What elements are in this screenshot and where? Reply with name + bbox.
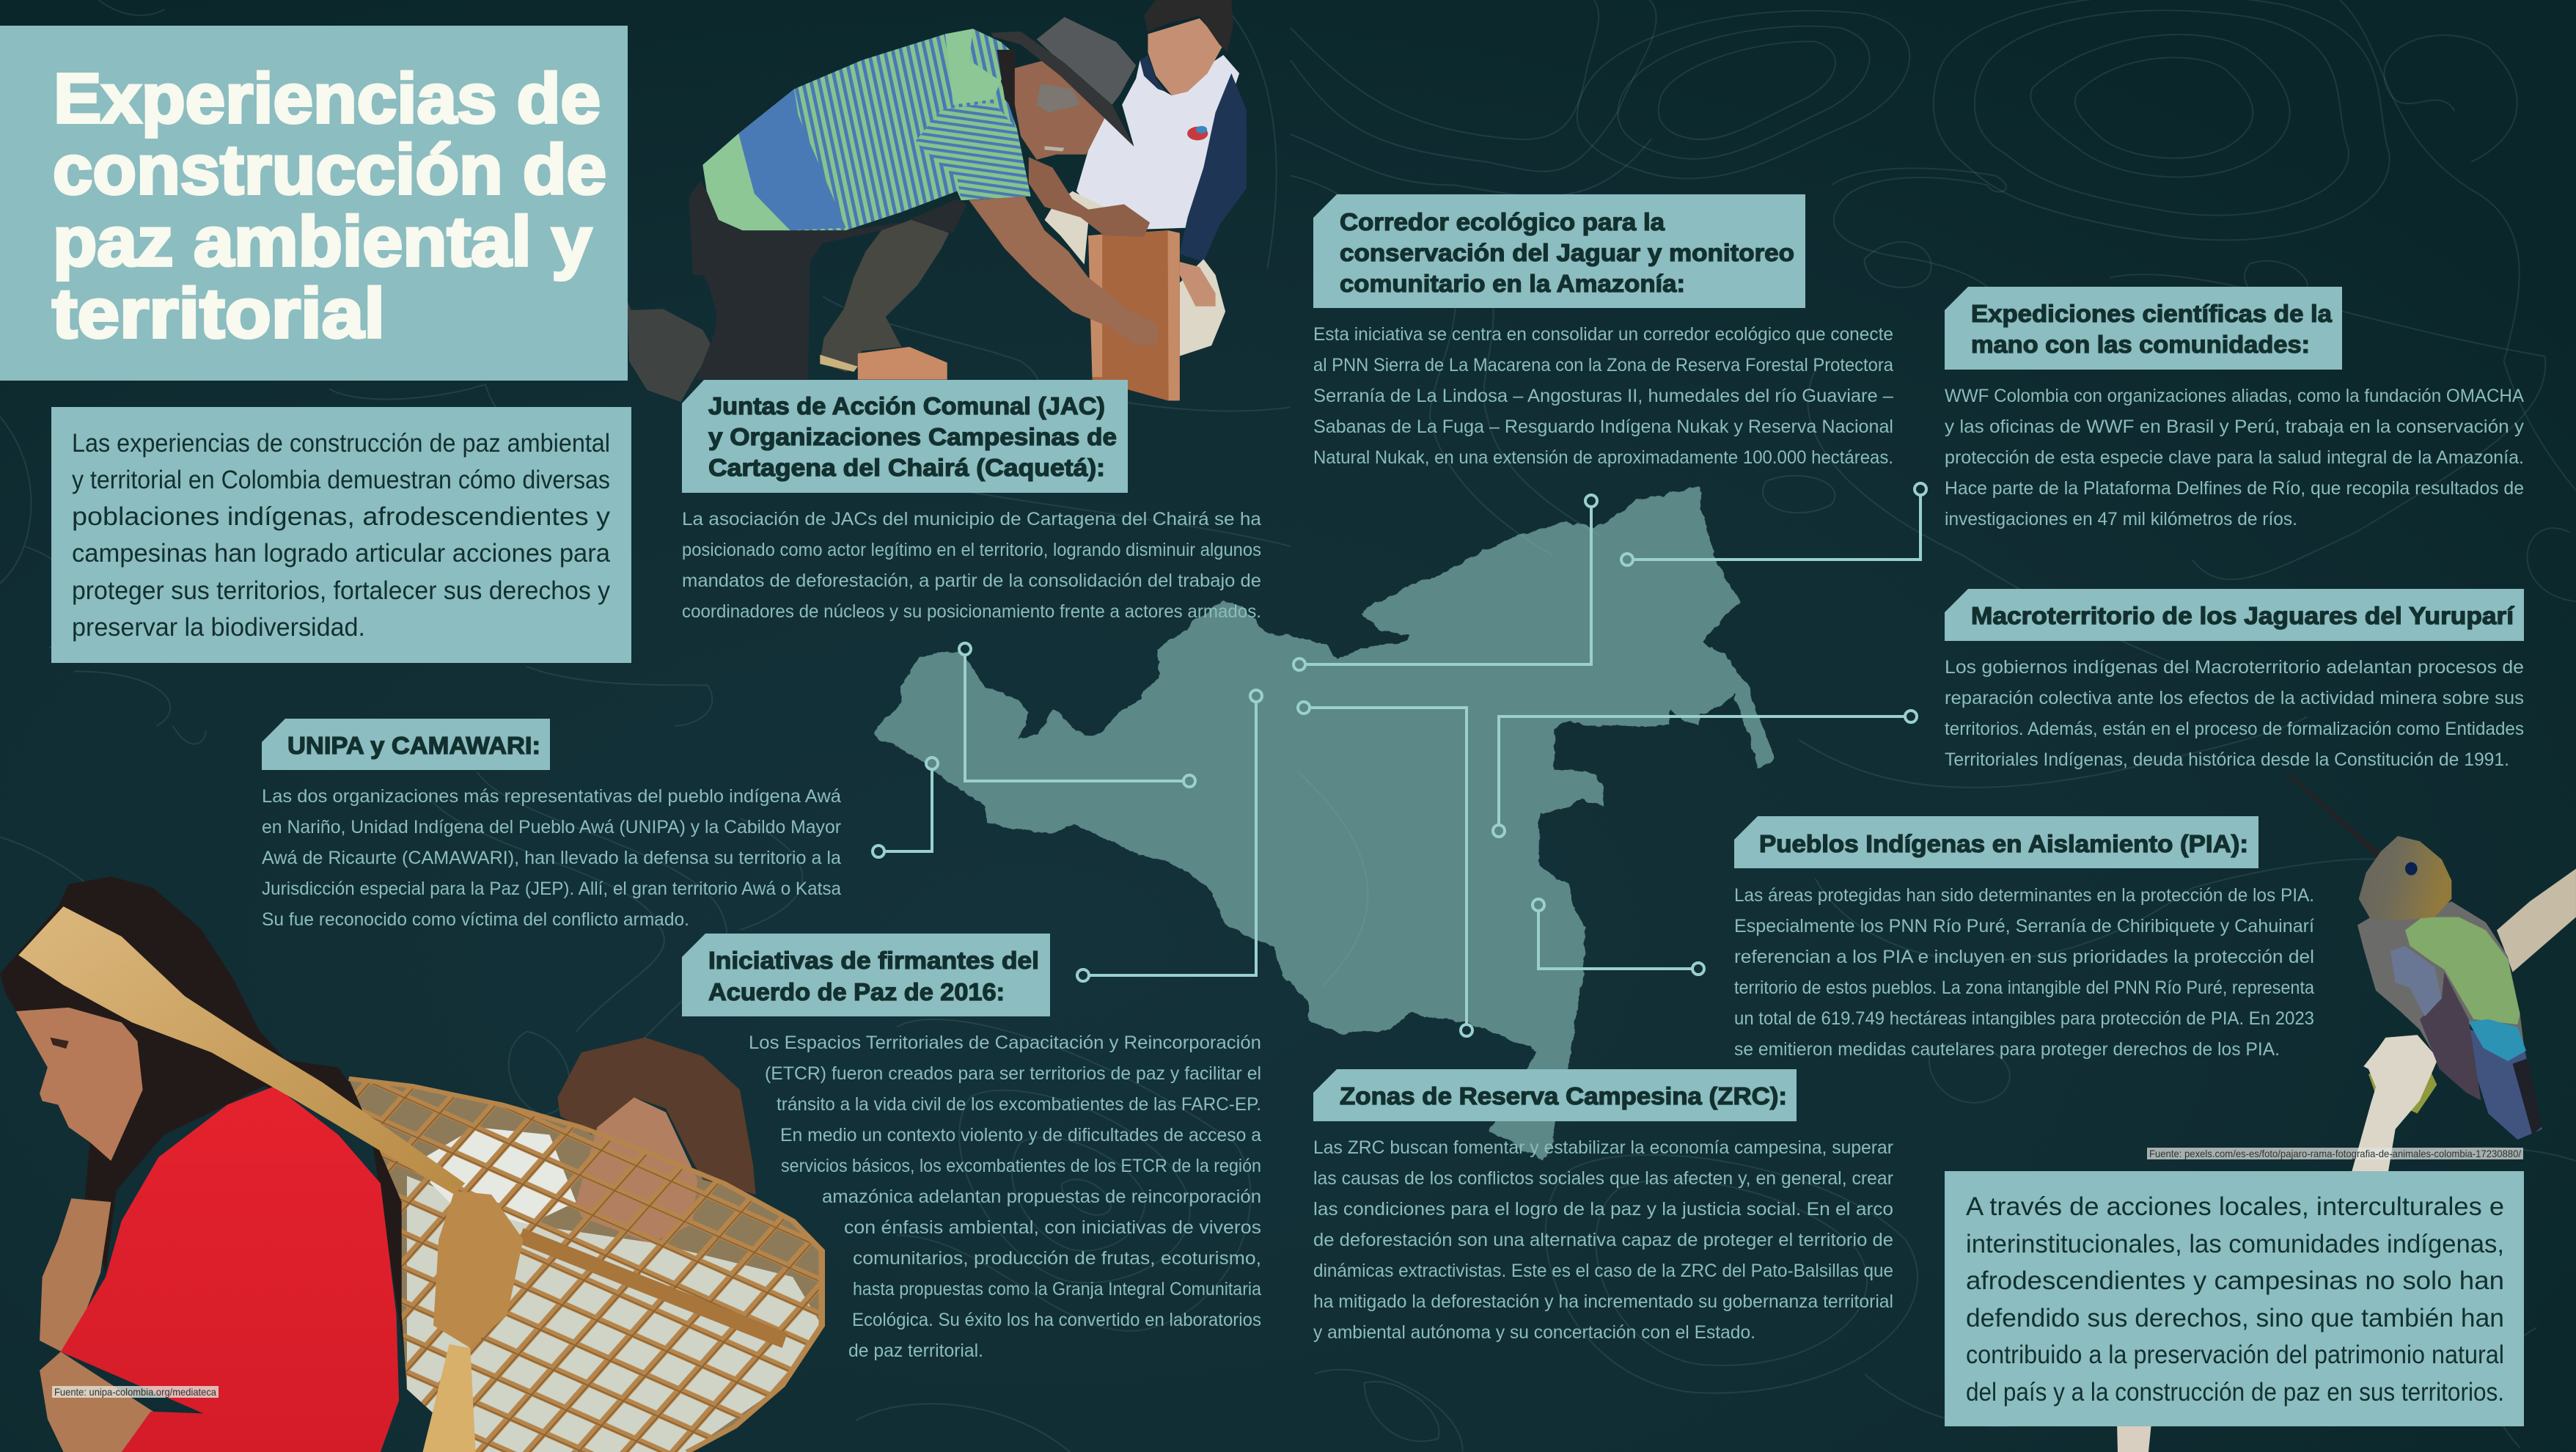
panel: conclusion: A través de acciones locales, interculturales e: [1966, 1192, 2504, 1221]
body text: Natural Nukak, en una extensión de aproximadamente 100.000 hectáreas.: [1313, 447, 1893, 468]
panel: conclusion: del país y a la construcción de paz en sus territorios.: [1966, 1378, 2504, 1407]
body text: de paz territorial.: [848, 1341, 983, 1361]
body text: hasta propuestas como la Granja Integral Comunitaria: [853, 1279, 1261, 1299]
tail: [2464, 1027, 2542, 1140]
panel: introduction: Las experiencias de construcción de paz ambiental: [72, 429, 610, 458]
body text: Esta iniciativa se centra en consolidar un corredor ecológico que conecte: [1313, 324, 1893, 345]
panel: conclusion: interinstitucionales, las comunidades indígenas,: [1966, 1230, 2504, 1258]
man: rear boot: [627, 301, 713, 402]
body text: Especialmente los PNN Río Puré, Serranía de Chiribiquete y Cahuinarí: [1734, 916, 2314, 936]
body text: La asociación de JACs del municipio de Cartagena del Chairá se ha: [682, 509, 1261, 529]
body text: las causas de los conflictos sociales que las afecten y, en general, crear: [1313, 1168, 1893, 1189]
body text: Awá de Ricaurte (CAMAWARI), han llevado la defensa su territorio a la: [262, 848, 841, 868]
body text: [1945, 657, 2524, 770]
body text: territorios. Además, están en el proceso de formalización como Entidades: [1945, 719, 2524, 739]
body text: [1734, 885, 2314, 1060]
upper branch: [2497, 869, 2576, 972]
woven basket: [349, 1079, 822, 1452]
panel: introduction: campesinas han logrado articular acciones para: [72, 539, 611, 568]
body text: dinámicas extractivistas. Este es el caso de la ZRC del Pato-Balsillas que: [1313, 1261, 1893, 1281]
connector: Iniciativas de firmantes: [1077, 690, 1262, 981]
body text: Sabanas de La Fuga – Resguardo Indígena Nukak y Reserva Nacional: [1313, 417, 1893, 437]
heading: [708, 392, 1117, 481]
body text: En medio un contexto violento y de dificultades de acceso a: [780, 1125, 1261, 1145]
man: front boot: [820, 220, 949, 372]
lower branch: [2352, 1035, 2438, 1173]
body text: Las ZRC buscan fomentar y estabilizar la economía campesina, superar: [1313, 1137, 1893, 1158]
body text: WWF Colombia con organizaciones aliadas, como la fundación OMACHA: [1945, 386, 2524, 406]
body text: Ecológica. Su éxito los ha convertido en laboratorios: [852, 1310, 1261, 1330]
photo: indigenous woman carrying child in basket: [0, 876, 822, 1452]
heading: [1340, 208, 1794, 297]
photo: hummingbird on branch: [2286, 773, 2576, 1173]
basket base: [349, 1079, 822, 1452]
body text: Hace parte de la Plataforma Delfines de Río, que recopila resultados de: [1945, 478, 2524, 499]
panel: introduction: proteger sus territorios, fortalecer sus derechos y: [72, 576, 610, 605]
block: Iniciativas de firmantes: [682, 934, 1261, 1361]
heading: [1971, 300, 2333, 358]
connector: Pueblos Indígenas: [1533, 899, 1704, 975]
panel: introduction: y territorial en Colombia demuestran cómo diversas: [72, 466, 610, 494]
body text: territorio de estos pueblos. La zona intangible del PNN Río Puré, representa: [1734, 978, 2314, 998]
block: Juntas de Acción Comunal: [682, 380, 1261, 622]
connector: Macroterritorio: [1493, 711, 1917, 837]
purple belly: [2420, 972, 2481, 1101]
cyan rump: [2469, 1019, 2526, 1061]
wooden nest box: [1088, 230, 1180, 400]
body text: con énfasis ambiental, con iniciativas de viveros: [844, 1217, 1261, 1238]
body text: coordinadores de núcleos y su posicionamiento frente a actores armados.: [682, 601, 1261, 622]
title: construcción de: [53, 131, 606, 209]
body text: [1945, 386, 2525, 529]
block: Macroterritorio: [1945, 589, 2524, 770]
title: paz ambiental y: [53, 202, 592, 281]
man: head: [997, 50, 1017, 113]
connector: Corredor ecológico: [1293, 495, 1597, 670]
head: [2359, 836, 2451, 920]
man: hat: [1037, 17, 1136, 107]
heading: Macroterritorio de los Jaguares del Yuruparí: [1971, 602, 2515, 629]
body text: servicios básicos, los excombatientes de los ETCR de la región: [781, 1156, 1261, 1176]
heading: y Organizaciones Campesinas de: [708, 423, 1117, 450]
beak: [2286, 773, 2388, 863]
body text: [682, 509, 1261, 622]
body text: se emitieron medidas cautelares para proteger derechos de los PIA.: [1734, 1039, 2280, 1060]
face: [16, 1008, 143, 1161]
red shirt: [61, 1086, 399, 1452]
heading: Expediciones científicas de la: [1971, 300, 2333, 327]
body text: [749, 1033, 1261, 1361]
block: Expediciones científicas: [1945, 287, 2525, 529]
heading: Zonas de Reserva Campesina (ZRC):: [1340, 1082, 1787, 1110]
body text: ha mitigado la deforestación y ha incrementado su gobernanza territorial: [1313, 1291, 1893, 1312]
panel: conclusion: contribuido a la preservación del patrimonio natural: [1966, 1341, 2504, 1369]
body: [2357, 901, 2525, 1071]
heading: comunitario en la Amazonía:: [1340, 270, 1685, 297]
heading: Iniciativas de firmantes del: [708, 947, 1039, 974]
body text: comunitarios, producción de frutas, ecoturismo,: [853, 1248, 1261, 1269]
man: shirt: [702, 29, 1031, 230]
panel: conclusion: afrodescendientes y campesinas no solo han: [1966, 1266, 2504, 1295]
block: UNIPA y CAMAWARI: [262, 719, 841, 930]
block: Pueblos Indígenas en Aislamiento: [1734, 816, 2314, 1060]
photo: farmer and woman with wooden box: [627, 0, 1247, 402]
body text: reparación colectiva ante los efectos de la actividad minera sobre sus: [1945, 688, 2524, 708]
block: Zonas de Reserva Campesina: [1313, 1069, 1893, 1343]
body text: amazónica adelantan propuestas de reincorporación: [822, 1187, 1261, 1207]
hair: [0, 876, 412, 1371]
man: arms: [1029, 157, 1150, 237]
title: [52, 59, 606, 353]
panel: conclusion: defendido sus derechos, sino que también han: [1966, 1304, 2504, 1332]
connector: Expediciones: [1621, 483, 1926, 565]
source caption: woman photo: Fuente: unipa-colombia.org/mediateca: [54, 1386, 216, 1398]
child: [557, 1038, 756, 1195]
body text: Territoriales Indígenas, deuda histórica desde la Constitución de 1991.: [1945, 749, 2509, 770]
blanket inside basket: [407, 1176, 822, 1452]
connector: JAC: [959, 643, 1195, 787]
connector: UNIPA: [873, 758, 938, 857]
heading: [708, 947, 1039, 1005]
man: trousers: [689, 180, 967, 393]
body text: Serranía de La Lindosa – Angosturas II, humedales del río Guaviare –: [1313, 386, 1893, 406]
body text: Las dos organizaciones más representativas del pueblo indígena Awá: [262, 786, 841, 807]
basket straps and knot: [518, 1228, 788, 1348]
heading: UNIPA y CAMAWARI:: [287, 732, 540, 759]
title: territorial: [52, 274, 385, 353]
source caption: bird photo: Fuente: pexels.com/es-es/foto/pajaro-rama-fotografia-de-animales-colombia-17230880/: [2149, 1148, 2521, 1159]
woman: white shirt: [1076, 55, 1239, 230]
heading: Corredor ecológico para la: [1340, 208, 1665, 235]
body text: Las áreas protegidas han sido determinantes en la protección de los PIA.: [1734, 885, 2314, 906]
branch below the closing panel: [2117, 1423, 2151, 1452]
body text: [1313, 324, 1893, 468]
title: Experiencias de: [54, 59, 601, 138]
body text: y ambiental autónoma y su concertación con el Estado.: [1313, 1322, 1755, 1343]
heading: Cartagena del Chairá (Caquetá):: [708, 454, 1105, 481]
body text: referencian a los PIA e incluyen en sus prioridades la protección del: [1734, 947, 2314, 967]
body text: de deforestación son una alternativa capaz de proteger el territorio de: [1313, 1230, 1893, 1250]
arm and hand: [40, 1198, 111, 1355]
body text: y las oficinas de WWF en Brasil y Perú, trabaja en la conservación y: [1945, 417, 2525, 437]
body text: tránsito a la vida civil de los excombatientes de las FARC-EP.: [777, 1094, 1261, 1115]
moss: [2368, 1061, 2437, 1113]
heading: Acuerdo de Paz de 2016:: [708, 978, 1005, 1005]
body text: Jurisdicción especial para la Paz (JEP). Allí, el gran territorio Awá o Katsa: [262, 879, 841, 899]
map of the Amazon and Pacific territory: [873, 486, 1773, 1161]
body text: posicionado como actor legítimo en el territorio, logrando disminuir algunos: [682, 540, 1261, 560]
body text: mandatos de deforestación, a partir de la consolidación del trabajo de: [682, 571, 1261, 591]
blue wing: [2390, 946, 2442, 1016]
body text: [262, 786, 841, 930]
panel: introduction: [51, 407, 631, 663]
heading: Pueblos Indígenas en Aislamiento (PIA):: [1759, 830, 2248, 857]
connector: Zonas de Reserva: [1298, 702, 1472, 1036]
panel: introduction: preservar la biodiversidad.: [72, 613, 365, 642]
heading: mano con las comunidades:: [1971, 331, 2310, 358]
body text: (ETCR) fueron creados para ser territorios de paz y facilitar el: [765, 1063, 1261, 1084]
body text: [1313, 1137, 1893, 1343]
panel: title: [0, 26, 628, 381]
heading: conservación del Jaguar y monitoreo: [1340, 239, 1794, 266]
connector lines between map and text blocks: [873, 483, 1926, 1036]
body text: Los gobiernos indígenas del Macroterritorio adelantan procesos de: [1945, 657, 2524, 678]
body text: las condiciones para el logro de la paz y la justicia social. En el arco: [1313, 1199, 1893, 1220]
panel: conclusion: [1945, 1171, 2524, 1426]
panel: introduction: poblaciones indígenas, afrodescendientes y: [72, 502, 611, 531]
body text: en Nariño, Unidad Indígena del Pueblo Awá (UNIPA) y la Cabildo Mayor: [262, 817, 841, 837]
body text: Su fue reconocido como víctima del conflicto armado.: [262, 909, 689, 930]
heading: Juntas de Acción Comunal (JAC): [708, 392, 1105, 419]
small wooden box: [858, 347, 947, 380]
body text: al PNN Sierra de La Macarena con la Zona de Reserva Forestal Protectora: [1313, 355, 1893, 375]
body text: Los Espacios Territoriales de Capacitación y Reincorporación: [749, 1033, 1261, 1053]
body text: un total de 619.749 hectáreas intangibles para protección de PIA. En 2023: [1734, 1008, 2314, 1029]
body text: investigaciones en 47 mil kilómetros de ríos.: [1945, 509, 2297, 529]
block: Corredor ecológico: [1313, 194, 1893, 468]
body text: protección de esta especie clave para la salud integral de la Amazonía.: [1945, 447, 2524, 468]
green back: [2405, 917, 2520, 1024]
basket rim: [349, 1079, 822, 1452]
